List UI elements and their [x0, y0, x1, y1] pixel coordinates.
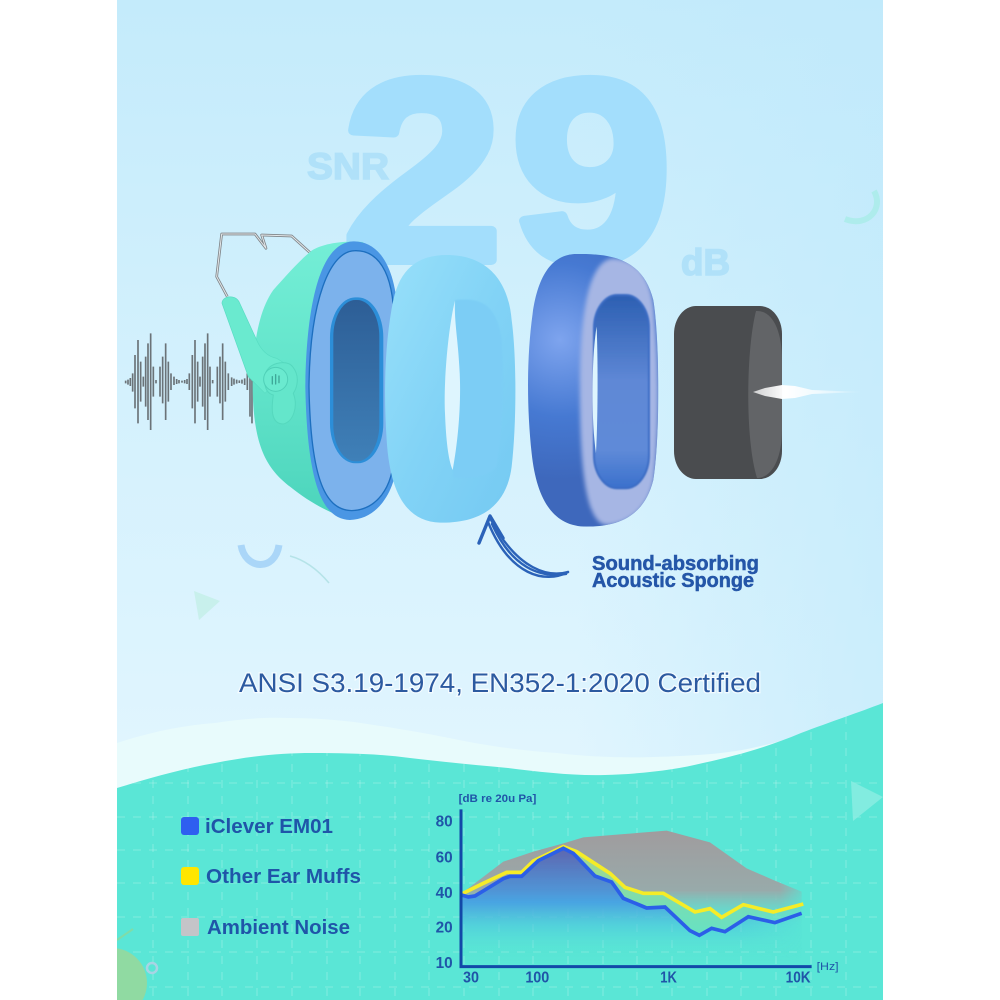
area: iClever: [462, 850, 785, 943]
line: iClever: [462, 848, 802, 935]
axis labels: 100: [525, 970, 549, 987]
axis unit Hz: [Hz]: [817, 961, 839, 973]
axis labels: 80: [436, 814, 453, 831]
ear muff shell: [217, 234, 398, 520]
logo: [272, 375, 279, 384]
axis labels: [436, 814, 811, 987]
cushion front face: [580, 258, 658, 525]
area: ambient noise: [466, 830, 802, 915]
decorative triangle left: [194, 591, 220, 620]
panel: teal chart area: [77, 700, 883, 1000]
legend: [181, 816, 361, 939]
axis labels: 1K: [660, 970, 677, 987]
label: SNR: SNR: [307, 146, 389, 187]
axis labels: 30: [463, 970, 479, 987]
axes: [461, 809, 812, 967]
decorative arc left: [241, 545, 329, 583]
axis labels: 40: [436, 885, 453, 902]
certification text: ANSI S3.19-1974, EN352-1:2020 Certified: [239, 668, 761, 698]
area: other muffs: [576, 853, 783, 933]
axis labels: 10K: [786, 970, 811, 987]
legend: iClever EM01: iClever EM01: [205, 816, 333, 838]
label: dB: dB: [681, 242, 730, 283]
big number 29: 29: [342, 27, 672, 316]
areas under the lines: [462, 850, 785, 943]
axis labels: 10: [436, 955, 453, 972]
blue rim: [305, 241, 398, 520]
white wave: [117, 703, 883, 800]
black foam: [674, 306, 782, 479]
callout: sound-absorbing sponge: Acoustic Sponge: [592, 570, 754, 592]
decorative stroke: [117, 929, 133, 940]
cushion opening: [593, 327, 598, 453]
sound wave in: [126, 333, 252, 430]
axis labels: 60: [436, 850, 453, 867]
shell body: [253, 242, 363, 517]
headband wire: [217, 234, 310, 297]
cavity: [330, 297, 383, 463]
callout: sound-absorbing sponge: [592, 553, 759, 592]
sponge ring: [385, 255, 515, 523]
arm: [222, 297, 290, 393]
decorative ring: [147, 963, 157, 973]
axis unit dB: [dB re 20u Pa]: [459, 793, 537, 805]
cushion cavity: [594, 295, 649, 488]
legend: Ambient Noise: Ambient Noise: [207, 917, 350, 939]
decorative green circle: [117, 948, 147, 1000]
decorative arc top right: [845, 191, 877, 221]
arm hub: [265, 363, 297, 424]
arrow to sponge: [479, 516, 568, 577]
blue cushion: [523, 250, 663, 530]
sound wave out: [753, 385, 863, 399]
panel: background: [117, 0, 883, 1000]
legend: Other Ear Muffs: Other Ear Muffs: [206, 866, 361, 888]
axis labels: 20: [436, 920, 453, 937]
blue plate: [309, 251, 394, 511]
decorative triangle right: [851, 781, 883, 821]
callout: sound-absorbing sponge: Sound-absorbing: [592, 553, 759, 575]
sponge inner wall: [453, 299, 503, 478]
line chart: [436, 793, 839, 987]
line: other muffs: [462, 847, 803, 917]
sponge opening: [445, 301, 460, 470]
